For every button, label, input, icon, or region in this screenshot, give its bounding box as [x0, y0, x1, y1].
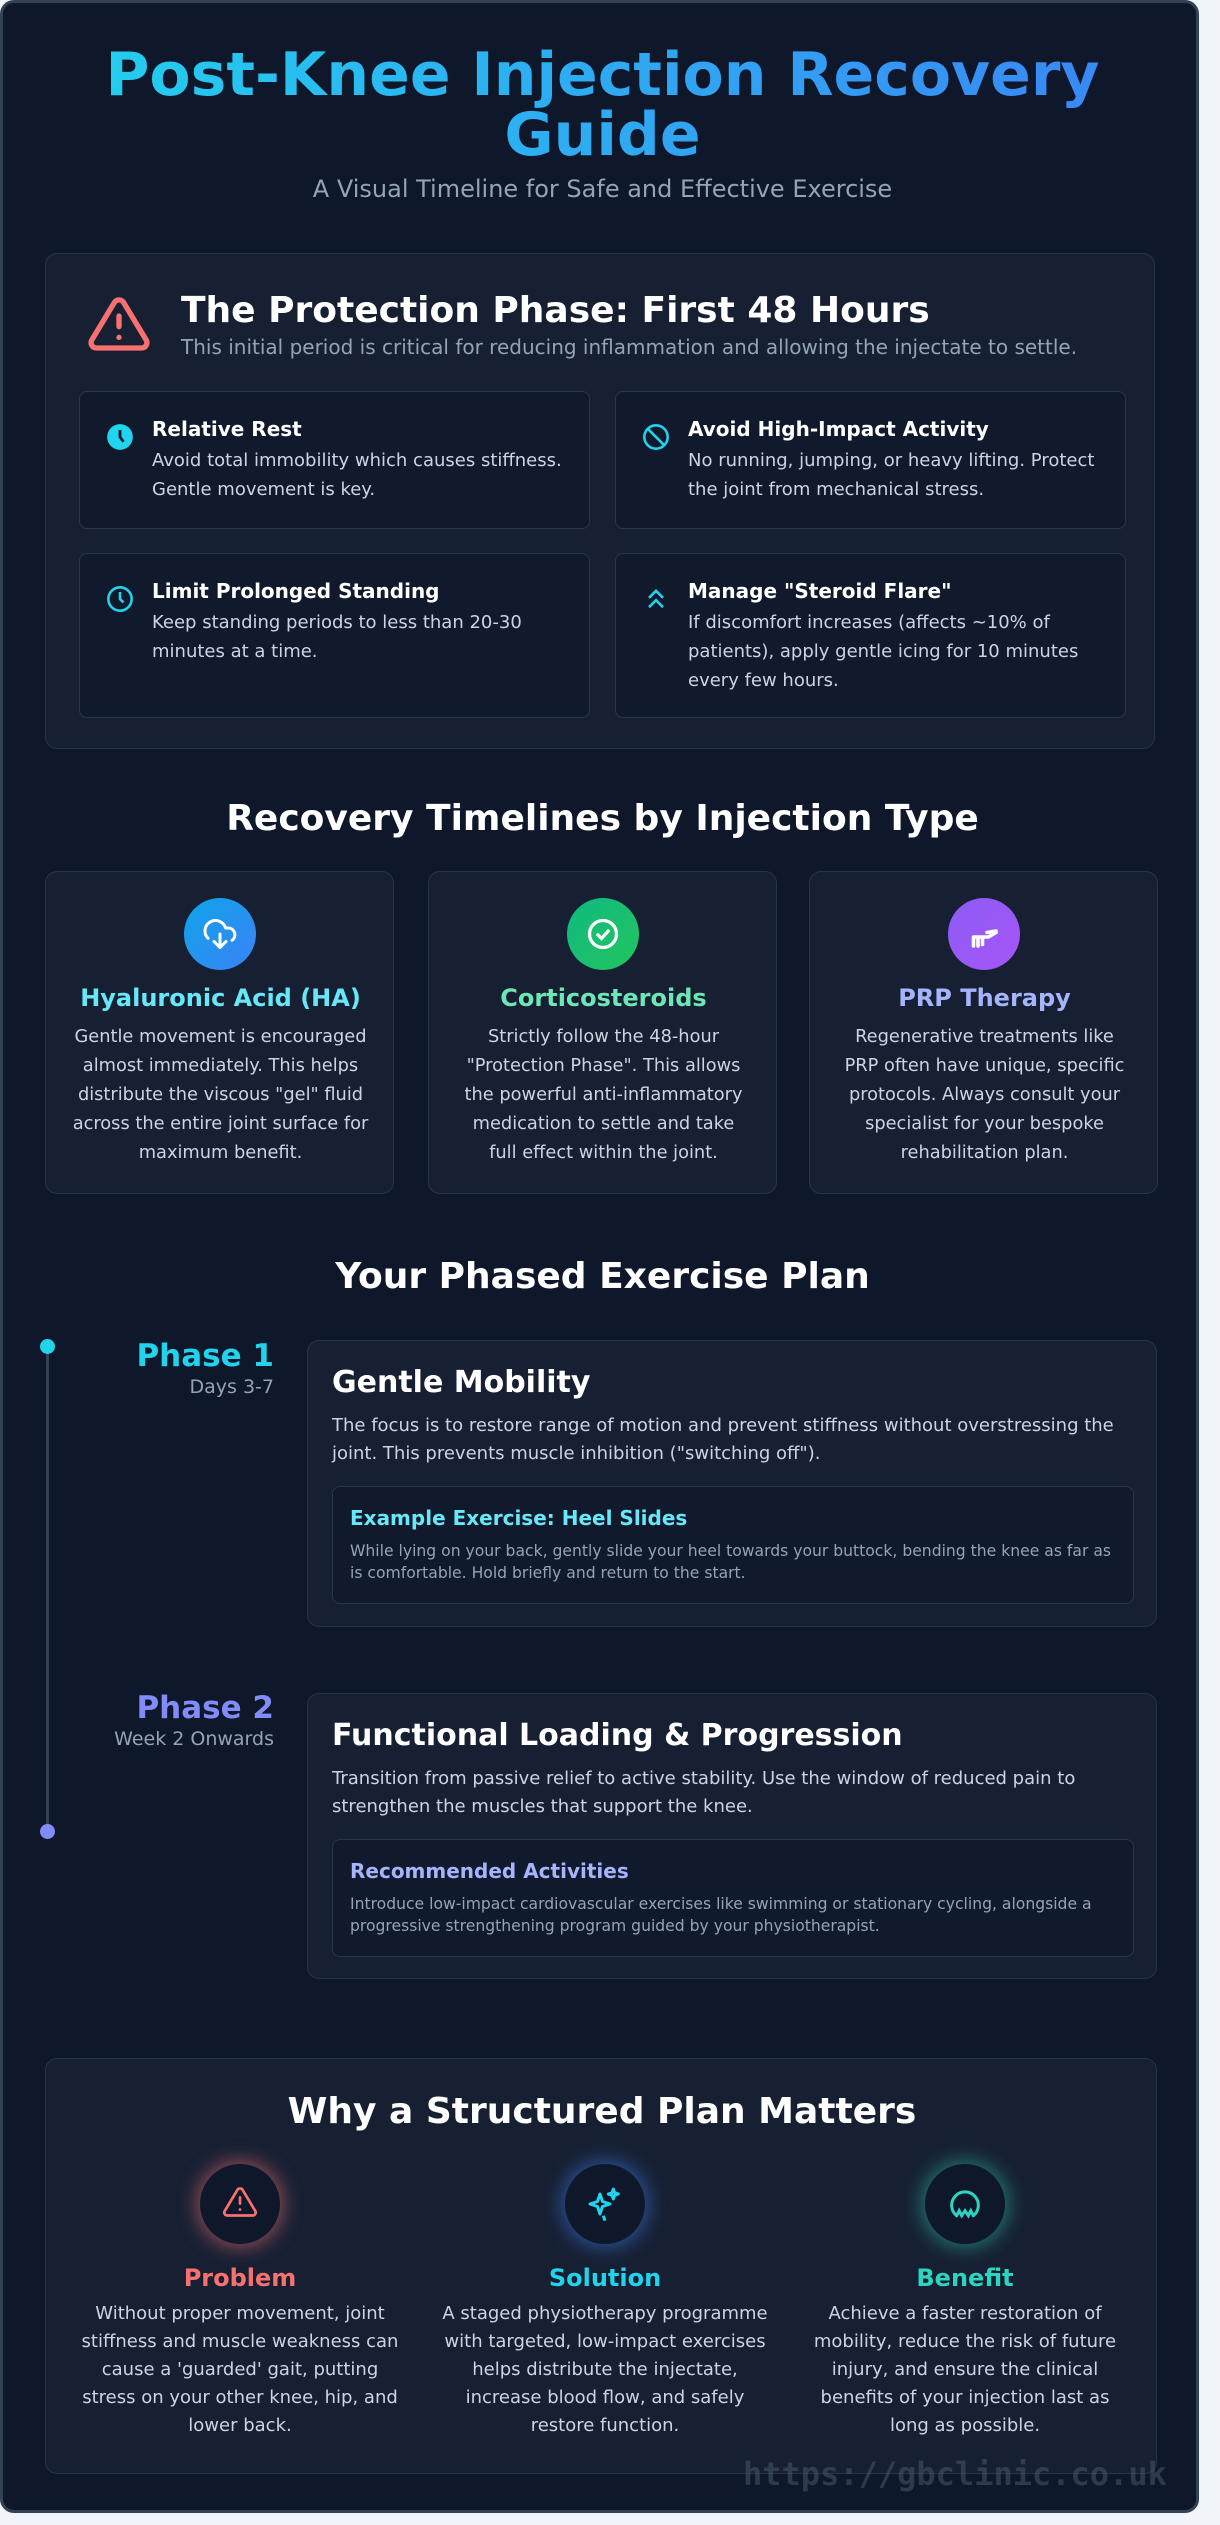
- item title: Relative Rest: [152, 417, 302, 441]
- item title: Limit Prolonged Standing: [152, 579, 440, 603]
- example exercise box: [332, 1486, 1134, 1604]
- heading: The Protection Phase: First 48 Hours: [181, 290, 930, 331]
- example exercise box: Example Exercise: Heel Slides: [350, 1506, 687, 1530]
- watermark: https://gbclinic.co.uk: [743, 2455, 1167, 2493]
- item: limit standing: [79, 553, 590, 718]
- icon: syringe: [948, 898, 1020, 970]
- column: benefit: Benefit: [916, 2264, 1014, 2292]
- subtitle: A Visual Timeline for Safe and Effective Exercise: [313, 175, 892, 203]
- icon: warning: [88, 297, 150, 351]
- item text: If discomfort increases (affects ~10% of patients), apply gentle icing for 10 minutes every few hours.: [688, 612, 1078, 691]
- panel: protection phase: [45, 253, 1155, 749]
- phase 2 label: Week 2 Onwards: [114, 1728, 274, 1750]
- item: steroid flare: [615, 553, 1126, 718]
- card: PRP: [809, 871, 1158, 1194]
- recommended activities box: Introduce low-impact cardiovascular exercises like swimming or stationary cycling, alongside a progressive strengthening program guided by your physiotherapist.: [350, 1895, 1092, 1935]
- heading: recovery timelines: Recovery Timelines by Injection Type: [226, 798, 979, 839]
- icon: double chevron: [648, 589, 664, 608]
- timeline dot 2: [40, 1824, 55, 1839]
- card text: Regenerative treatments like PRP often have unique, specific protocols. Always consult your specialist for your bespoke rehabilitation plan.: [845, 1026, 1124, 1163]
- icon: ban: [643, 424, 669, 450]
- column: solution: [442, 2149, 768, 2436]
- card: corticosteroids: [428, 871, 777, 1194]
- item text: No running, jumping, or heavy lifting. Protect the joint from mechanical stress.: [688, 450, 1094, 500]
- icon: check: [567, 898, 639, 970]
- card title: Hyaluronic Acid (HA): [80, 984, 361, 1012]
- card title: Gentle Mobility: [332, 1365, 590, 1400]
- phase 1 label: [136, 1338, 274, 1398]
- title: Post-Knee Injection Recovery: [105, 40, 1100, 110]
- icon: cloud download: [184, 898, 256, 970]
- card text: Transition from passive relief to active stability. Use the window of reduced pain to strengthen the muscles that support the knee.: [332, 1768, 1075, 1817]
- item: avoid high impact: [615, 391, 1126, 529]
- column: benefit: [814, 2150, 1116, 2436]
- card title: Corticosteroids: [500, 984, 707, 1012]
- column: problem: [82, 2148, 398, 2436]
- card text: Strictly follow the 48-hour "Protection Phase". This allows the powerful anti-inflammatory medication to settle and take full effect within the joint.: [465, 1026, 742, 1163]
- column: benefit: Achieve a faster restoration of mobility, reduce the risk of future injury, and ensure the clinical benefits of your injection last as long as possible.: [814, 2303, 1116, 2436]
- recommended activities box: Recommended Activities: [350, 1859, 629, 1883]
- icon: clock: [107, 586, 133, 612]
- phase 2 card: [307, 1693, 1157, 1979]
- card: hyaluronic acid: [45, 871, 394, 1194]
- title: Guide: [504, 100, 701, 170]
- panel: why structured plan: [45, 2058, 1157, 2474]
- phase 2 label: [114, 1690, 274, 1750]
- phase 1 label: Phase 1: [136, 1338, 274, 1374]
- card title: PRP Therapy: [898, 984, 1071, 1012]
- icon: clock filled: [107, 424, 133, 450]
- card text: The focus is to restore range of motion and prevent stiffness without overstressing the joint. This prevents muscle inhibition ("switching off").: [332, 1415, 1114, 1464]
- item title: Avoid High-Impact Activity: [688, 417, 989, 441]
- card title: Functional Loading & Progression: [332, 1718, 903, 1753]
- column: problem: Without proper movement, joint stiffness and muscle weakness can cause a 'guarded' gait, putting stress on your other knee, hip, and lower back.: [82, 2303, 398, 2436]
- item title: Manage "Steroid Flare": [688, 579, 952, 603]
- heading: phased exercise plan: Your Phased Exercise Plan: [335, 1256, 870, 1297]
- column: solution: Solution: [549, 2264, 661, 2292]
- item text: Avoid total immobility which causes stiffness. Gentle movement is key.: [152, 450, 562, 500]
- phase 1 card: [307, 1340, 1157, 1627]
- item text: Keep standing periods to less than 20-30 minutes at a time.: [152, 612, 522, 662]
- timeline line: [46, 1348, 49, 1831]
- subheading: This initial period is critical for reducing inflammation and allowing the injectate to settle.: [181, 335, 1077, 359]
- card text: Gentle movement is encouraged almost immediately. This helps distribute the viscous "gel" fluid across the entire joint surface for maximum benefit.: [73, 1026, 368, 1163]
- recommended activities box: [332, 1839, 1134, 1957]
- phase 2 label: Phase 2: [136, 1690, 274, 1726]
- phase 1 label: Days 3-7: [190, 1376, 274, 1398]
- example exercise box: While lying on your back, gently slide your heel towards your buttock, bending the knee as far as is comfortable. Hold briefly and return to the start.: [350, 1542, 1111, 1582]
- item: relative rest: [79, 391, 590, 529]
- column: problem: Problem: [184, 2264, 296, 2292]
- heading: Why a Structured Plan Matters: [288, 2091, 916, 2132]
- timeline dot 1: [40, 1339, 55, 1354]
- title: [3, 45, 1202, 165]
- column: solution: A staged physiotherapy programme with targeted, low-impact exercises helps distribute the injectate, increase blood flow, and safely restore function.: [442, 2303, 768, 2436]
